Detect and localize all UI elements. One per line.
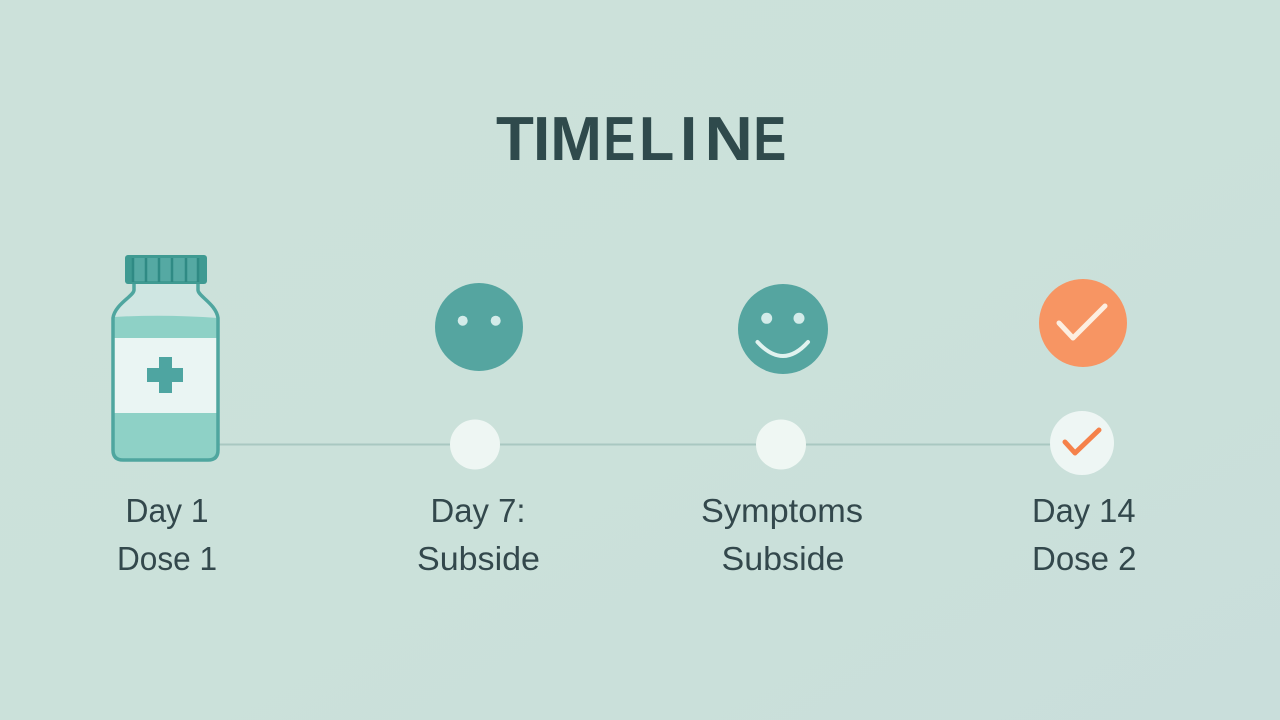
title — [496, 103, 786, 174]
icon: medicine bottle — [113, 255, 218, 460]
icon: neutral face — [435, 283, 523, 371]
label: day 7 subside — [417, 492, 540, 577]
label: day 1 dose 1 — [117, 492, 217, 577]
icon: medical cross — [147, 357, 183, 393]
milestone marker: day 14 check — [1050, 411, 1114, 475]
milestone marker: symptoms subside — [756, 420, 806, 470]
title: I — [680, 105, 697, 174]
label: day 14 dose 2 — [1032, 492, 1136, 577]
label: symptoms subside — [701, 492, 863, 577]
title: T — [496, 105, 534, 174]
title: L — [639, 104, 674, 173]
title: M — [550, 105, 602, 174]
icon: orange check badge — [1039, 279, 1127, 367]
title: E — [754, 103, 786, 173]
title: N — [704, 104, 753, 173]
icon: smiling face — [738, 284, 828, 374]
label: day 1 dose 1: Day 1 — [126, 492, 208, 529]
label: day 14 dose 2: Dose 2 — [1032, 540, 1136, 577]
title: E — [604, 104, 635, 174]
label: day 7 subside: Subside — [417, 540, 540, 577]
label: symptoms subside: Symptoms — [701, 492, 863, 529]
label: day 7 subside: Day 7: — [430, 492, 526, 529]
timeline line — [219, 444, 1060, 446]
label: symptoms subside: Subside — [722, 540, 844, 577]
title: I — [533, 105, 550, 174]
label: day 1 dose 1: Dose 1 — [117, 540, 217, 577]
milestone marker: day 7 — [450, 420, 500, 470]
label: day 14 dose 2: Day 14 — [1032, 492, 1136, 529]
